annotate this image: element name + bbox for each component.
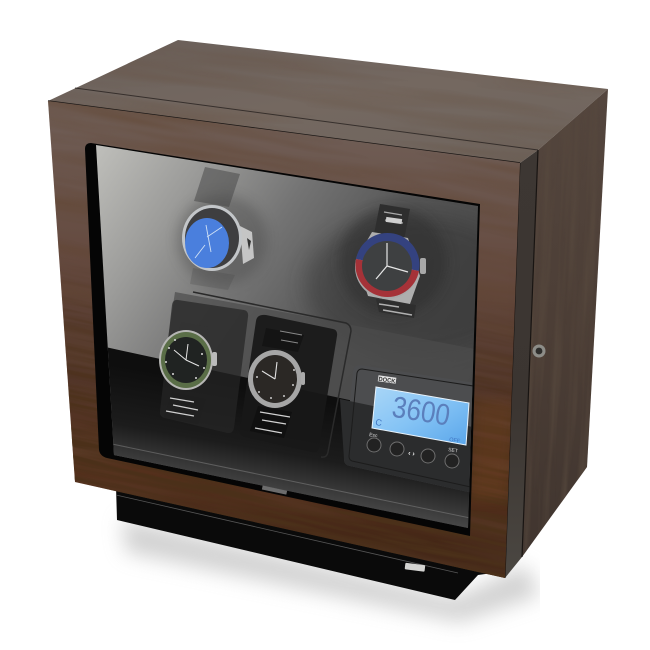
lcd off label: OFF [449, 437, 461, 445]
watch: bottom left green bezel [159, 330, 217, 417]
panel edge [193, 292, 351, 457]
cabinet front door frame [48, 101, 520, 578]
control panel [340, 368, 472, 492]
button labels: SET [448, 447, 458, 454]
door latch tab [262, 486, 287, 495]
lcd display [372, 387, 469, 445]
lock [532, 344, 546, 358]
usb port on base [405, 563, 425, 572]
orange gloss on lower right of frame [474, 404, 511, 498]
right lower pillow [246, 314, 338, 404]
lower interior lip [112, 444, 470, 518]
plinth base [116, 486, 500, 600]
glass window [85, 143, 480, 536]
door edge strip [505, 150, 538, 578]
left lower pillow [160, 300, 248, 433]
floor shadow [122, 518, 540, 622]
control buttons [367, 438, 459, 468]
button labels: ‹ › [408, 450, 416, 458]
shelf panel [168, 292, 474, 379]
black window gasket [85, 143, 480, 536]
lcd reading: 3600 [390, 391, 452, 432]
watch: top left blue dial [177, 167, 267, 290]
product photo: watch winder cabinet [48, 40, 608, 629]
lcd mode letter: C [375, 417, 383, 428]
cabinet right side [505, 89, 608, 578]
watch: top right pepsi bezel [339, 204, 447, 318]
watch: bottom centre [248, 328, 305, 438]
cabinet top face [48, 40, 608, 163]
button labels [369, 432, 458, 456]
brand badge: DOCK [378, 377, 396, 385]
interior shade behind right watch [302, 216, 477, 345]
lower reflection [108, 348, 469, 528]
button labels: Esc [369, 432, 378, 439]
